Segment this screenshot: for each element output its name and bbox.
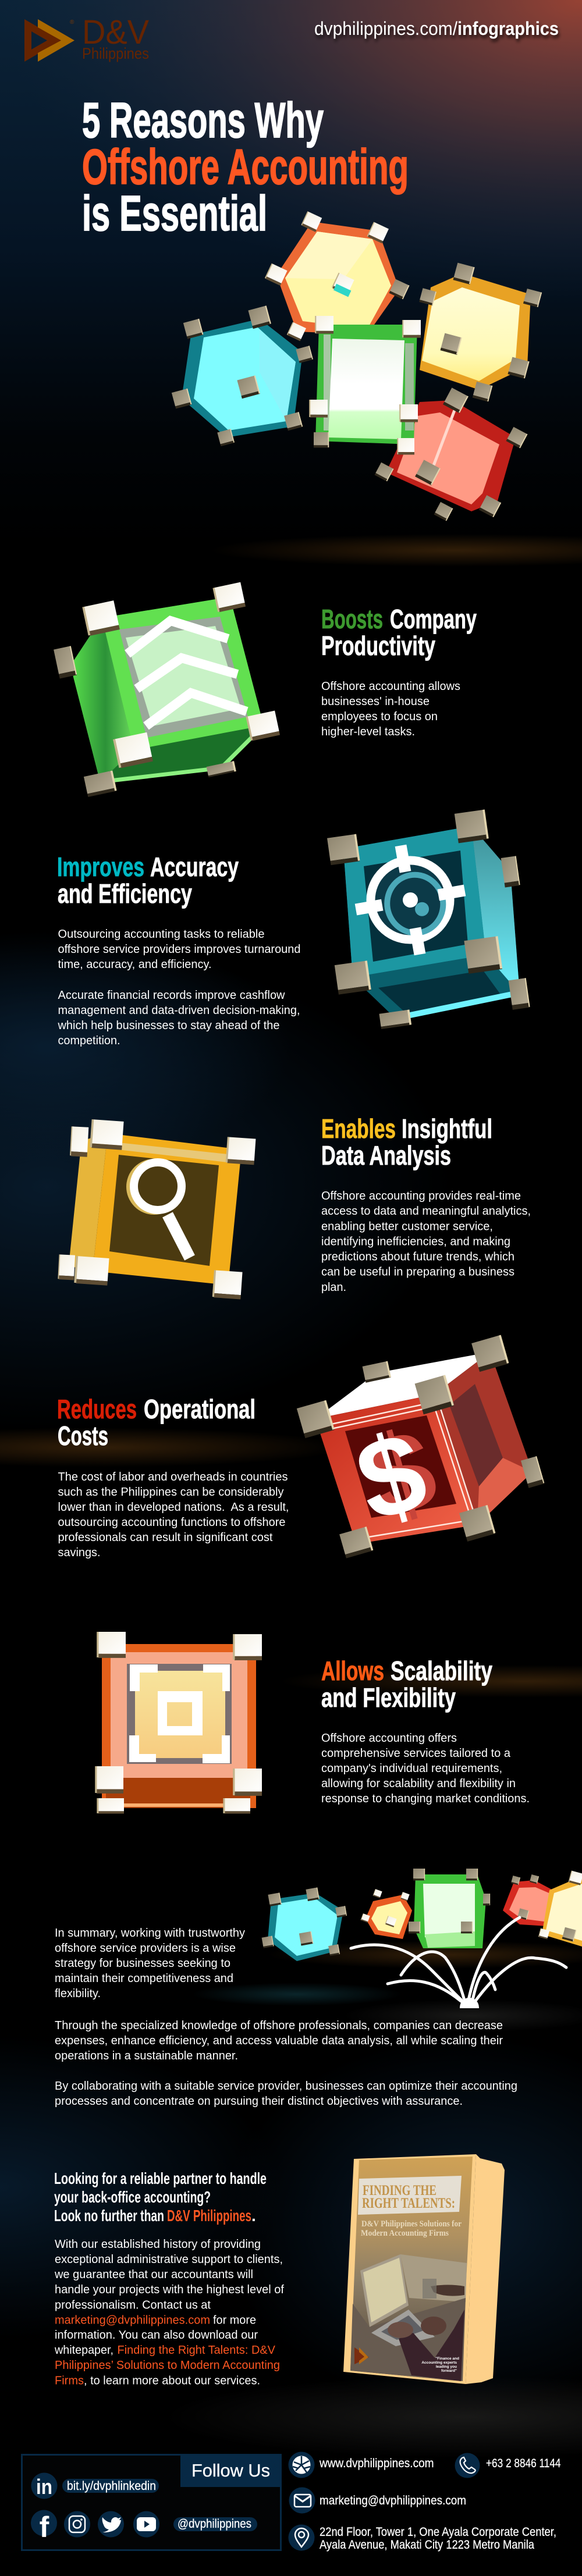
follow us panel: Follow Us — [191, 2460, 270, 2481]
summary text: expenses, enhance efficiency, and access valuable data analysis, all while scaling their — [55, 2034, 503, 2047]
icon: dollar sign: $ — [354, 1404, 449, 1543]
section 2: heading: Accuracy — [150, 852, 239, 882]
call to action body text: information. You can also download our — [55, 2329, 258, 2342]
section 3: body text: Offshore accounting provides real-time — [321, 1190, 521, 1202]
cube: small blue — [262, 1887, 347, 1961]
contact: email: marketing@dvphilippines.com — [320, 2494, 466, 2507]
section 4: red cube icon — [297, 1335, 545, 1559]
logo: D&V Philippines: ® — [70, 19, 74, 26]
book tagline: "Finance and — [435, 2357, 459, 2361]
summary text: By collaborating with a suitable service provider, businesses can optimize their accounting — [55, 2080, 517, 2093]
section 2: heading — [57, 852, 239, 909]
follow us panel — [22, 2454, 282, 2550]
call to action body text: Finding the Right Talents: D&V — [118, 2344, 276, 2357]
title: Offshore Accounting — [82, 140, 409, 195]
website url: infographics — [457, 18, 559, 39]
section 4: body text: lower than in developed nations. As a result, — [58, 1501, 289, 1514]
logo: D&V Philippines: Philippines — [82, 45, 149, 62]
section 3: body text: predictions about future trends, which — [321, 1251, 514, 1264]
section 2: teal cube icon — [327, 810, 530, 1029]
call to action heading: Looking for a reliable partner to handle — [54, 2169, 267, 2187]
contact: address: Ayala Avenue, Makati City 1223 Metro Manila — [320, 2538, 534, 2552]
contact: phone — [455, 2453, 561, 2478]
section 1: heading: Boosts — [321, 604, 383, 634]
section 4: body text: professionals can result in significant cost — [58, 1531, 273, 1544]
icon: white fountain — [351, 1917, 566, 2008]
section 4: heading — [57, 1394, 255, 1451]
book tagline — [421, 2357, 459, 2373]
section 1: body text: Offshore accounting allows — [321, 680, 460, 693]
call to action heading — [54, 2169, 267, 2225]
book logo — [354, 2347, 369, 2364]
section 2: body text: management and data-driven decision-making, — [58, 1004, 300, 1017]
call to action body text: With our established history of providing — [55, 2238, 261, 2251]
social handle: @dvphilippines — [178, 2517, 251, 2531]
hero illustration: five glass cubes — [172, 211, 542, 521]
section 4: body text: such as the Philippines can be considerably — [58, 1486, 284, 1499]
summary text: processes and concentrate on pursuing their distinct objectives with assurance. — [55, 2095, 463, 2108]
summary illustration: cubes bursting from fountain — [262, 1869, 582, 2008]
call to action body text: marketing@dvphilippines.com — [55, 2314, 210, 2327]
section 4: body text: The cost of labor and overheads in countries — [58, 1471, 288, 1483]
call to action body text — [54, 2238, 284, 2388]
section 2: body text: Outsourcing accounting tasks to reliable — [58, 928, 265, 941]
section 4: heading: Operational — [144, 1394, 255, 1424]
section 3: heading: Data Analysis — [321, 1140, 451, 1170]
section 1: heading: Productivity — [321, 631, 435, 661]
cube: green hero — [309, 316, 421, 455]
cube: blue hero — [172, 305, 313, 446]
section 4: body text: savings. — [58, 1546, 100, 1559]
contact: phone: +63 2 8846 1144 — [486, 2457, 561, 2470]
icon: magnifying glass — [130, 1162, 190, 1258]
section 3: heading: Insightful — [402, 1113, 492, 1144]
title — [82, 93, 409, 241]
section 3: body text: plan. — [321, 1281, 346, 1294]
section 4: heading: Reduces — [57, 1394, 137, 1424]
logo: D&V Philippines — [24, 13, 149, 62]
section 5: heading — [321, 1656, 492, 1713]
section 1: heading — [321, 604, 477, 661]
whitepaper book — [343, 2154, 505, 2384]
call to action body text: professionalism. Contact us at — [55, 2299, 211, 2312]
book photo: laptop on table — [350, 2254, 467, 2381]
book title: FINDING THE — [363, 2183, 436, 2198]
call to action body text: exceptional administrative support to clients, — [55, 2253, 283, 2266]
linkedin handle: bit.ly/dvphlinkedin — [67, 2479, 156, 2493]
contact: website — [289, 2452, 434, 2478]
book tagline: forward" — [441, 2369, 457, 2373]
summary text: offshore service providers is a wise — [55, 1942, 236, 1955]
section 2: heading: and Efficiency — [58, 878, 192, 909]
cube: small orange — [361, 1889, 412, 1939]
icon: instagram — [64, 2511, 90, 2538]
icon: linkedin: in — [36, 2475, 52, 2499]
section 5: heading: Scalability — [391, 1656, 492, 1686]
call to action heading: . — [251, 2207, 256, 2225]
call to action body text: handle your projects with the highest level of — [55, 2283, 284, 2296]
section 5: body text: comprehensive services tailored to a — [321, 1747, 511, 1760]
section 2: body text: competition. — [58, 1034, 120, 1047]
section 5: heading: Allows — [321, 1656, 384, 1686]
section 1: body text: employees to focus on — [321, 710, 438, 723]
section 3: yellow cube icon — [58, 1119, 255, 1299]
section 5: body text — [321, 1732, 530, 1805]
book title — [361, 2183, 462, 2238]
title: 5 Reasons Why — [82, 93, 324, 148]
section 4: body text — [58, 1471, 289, 1559]
book title: D&V Philippines Solutions for — [361, 2219, 462, 2229]
icon: twitter — [98, 2511, 124, 2538]
call to action heading: D&V Philippines — [167, 2207, 251, 2225]
icon: crosshair target — [346, 836, 474, 964]
section 3: heading — [321, 1113, 492, 1170]
section 2: heading: Improves — [57, 852, 144, 882]
book tagline: Accounting experts — [421, 2361, 457, 2365]
icon: facebook: f — [40, 2511, 49, 2543]
cube: small green — [409, 1869, 490, 1948]
section 3: body text: access to data and meaningful analytics, — [321, 1205, 531, 1218]
section 2: body text — [58, 928, 300, 1047]
section 1: heading: Company — [390, 604, 477, 634]
icon: dollar sign: $ — [343, 1407, 439, 1546]
website url — [314, 18, 559, 39]
call to action heading: Look no further than — [54, 2207, 164, 2225]
section 4: body text: outsourcing accounting functions to offshore — [58, 1516, 285, 1529]
contact: address — [289, 2525, 556, 2552]
section 2: body text: Accurate financial records improve cashflow — [58, 989, 285, 1002]
book title: RIGHT TALENTS: — [362, 2196, 455, 2211]
section 3: body text — [321, 1190, 531, 1294]
section 3: body text: enabling better customer service, — [321, 1221, 493, 1233]
title: is Essential — [82, 186, 267, 241]
section 2: body text: time, accuracy, and efficiency. — [58, 958, 212, 971]
section 1: green cube icon — [54, 582, 280, 797]
section 3: body text: identifying inefficiencies, and making — [321, 1236, 510, 1248]
summary text: strategy for businesses seeking to — [55, 1957, 230, 1970]
summary text: flexibility. — [55, 1987, 101, 2000]
cube: yellow hero — [419, 263, 542, 402]
section 3: heading: Enables — [321, 1113, 396, 1144]
section 4: heading: Costs — [58, 1421, 108, 1451]
section 5: body text: allowing for scalability and flexibility in — [321, 1777, 516, 1790]
section 5: heading: and Flexibility — [321, 1682, 456, 1713]
cube: orange hero — [265, 211, 410, 341]
section 2: body text: offshore service providers improves turnaround — [58, 943, 300, 956]
call to action body text: for more — [213, 2314, 256, 2327]
icon: scale frame — [129, 1664, 230, 1763]
logo: D&V Philippines: D&V — [82, 13, 149, 51]
section 3: body text: can be useful in preparing a business — [321, 1266, 514, 1279]
section 5: orange cube icon — [95, 1632, 262, 1814]
call to action heading: your back-office accounting? — [54, 2188, 211, 2206]
summary text: maintain their competitiveness and — [55, 1972, 233, 1985]
summary text: In summary, working with trustworthy — [55, 1927, 245, 1940]
section 5: body text: company's individual requirements, — [321, 1762, 502, 1775]
call to action body text: , to learn more about our services. — [84, 2375, 260, 2388]
section 5: body text: response to changing market conditions. — [321, 1792, 530, 1805]
call to action body text: whitepaper, — [54, 2344, 113, 2357]
contact: email — [289, 2488, 466, 2513]
contact: website: www.dvphilippines.com — [319, 2457, 434, 2470]
section 5: body text: Offshore accounting offers — [321, 1732, 457, 1745]
section 1: body text — [321, 680, 460, 738]
section 1: body text: businesses' in-house — [321, 695, 430, 708]
cube: small yellow — [538, 1870, 582, 1947]
call to action body text: Firms — [55, 2375, 84, 2388]
cube: red hero — [375, 387, 527, 521]
section 1: body text: higher-level tasks. — [321, 725, 415, 738]
section 2: body text: which help businesses to stay ahead of the — [58, 1019, 279, 1032]
summary text: operations in a sustainable manner. — [55, 2050, 238, 2062]
icon: youtube — [133, 2511, 159, 2538]
summary text: Through the specialized knowledge of offshore professionals, companies can decrease — [55, 2019, 503, 2032]
icon: facebook — [31, 2510, 57, 2543]
book tagline: leading you — [436, 2365, 457, 2369]
call to action body text: we guarantee that our accountants will — [54, 2268, 253, 2281]
icon: linkedin — [31, 2472, 57, 2499]
website url: dvphilippines.com/ — [314, 18, 457, 39]
cube: small red — [503, 1874, 553, 1926]
summary text — [55, 1927, 517, 2108]
icon: three upward chevrons — [127, 621, 247, 726]
call to action body text: Philippines’ Solutions to Modern Accounting — [55, 2359, 280, 2372]
book title: Modern Accounting Firms — [361, 2229, 449, 2238]
